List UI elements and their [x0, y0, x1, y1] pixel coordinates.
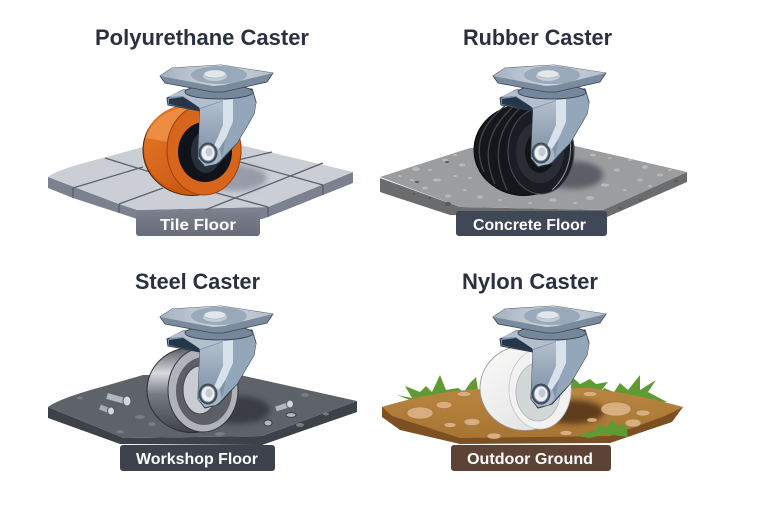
- label: Concrete Floor: Concrete Floor: [473, 217, 586, 234]
- panel: rubber caster on concrete floor: [380, 25, 687, 236]
- label: Tile Floor: [136, 212, 260, 236]
- swivel bracket and top plate: [493, 65, 606, 167]
- label: Concrete Floor: [456, 211, 607, 236]
- black rubber wheel: [474, 104, 574, 196]
- label: Workshop Floor: Workshop Floor: [136, 451, 258, 468]
- swivel bracket and top plate: [160, 306, 273, 408]
- tile floor platform: [48, 145, 353, 219]
- swivel bracket and top plate: [160, 65, 273, 167]
- heading: Rubber Caster: Rubber Caster: [463, 25, 612, 50]
- orange polyurethane wheel: [143, 104, 241, 196]
- white nylon wheel: [480, 346, 571, 430]
- label: Workshop Floor: [120, 445, 275, 471]
- stones: [407, 392, 650, 439]
- grass tufts: [397, 375, 667, 404]
- label: Outdoor Ground: [451, 445, 611, 471]
- panel: polyurethane caster on tile floor: [48, 25, 353, 236]
- bolts on floor: [100, 396, 296, 426]
- concrete floor platform: [380, 145, 687, 217]
- heading: Nylon Caster: Nylon Caster: [462, 269, 598, 294]
- swivel bracket and top plate: [493, 306, 606, 408]
- label: Tile Floor: Tile Floor: [160, 217, 236, 234]
- front grass tuft: [577, 420, 628, 438]
- heading: Polyurethane Caster: Polyurethane Caster: [95, 25, 309, 50]
- steel wheel: [147, 348, 238, 432]
- heading: Steel Caster: Steel Caster: [135, 269, 260, 294]
- outdoor ground platform: [382, 375, 683, 444]
- label: Outdoor Ground: Outdoor Ground: [467, 451, 593, 468]
- workshop floor platform: [48, 375, 357, 445]
- panel: steel caster on workshop floor: [48, 269, 357, 471]
- panel: nylon caster on outdoor ground: [382, 269, 683, 471]
